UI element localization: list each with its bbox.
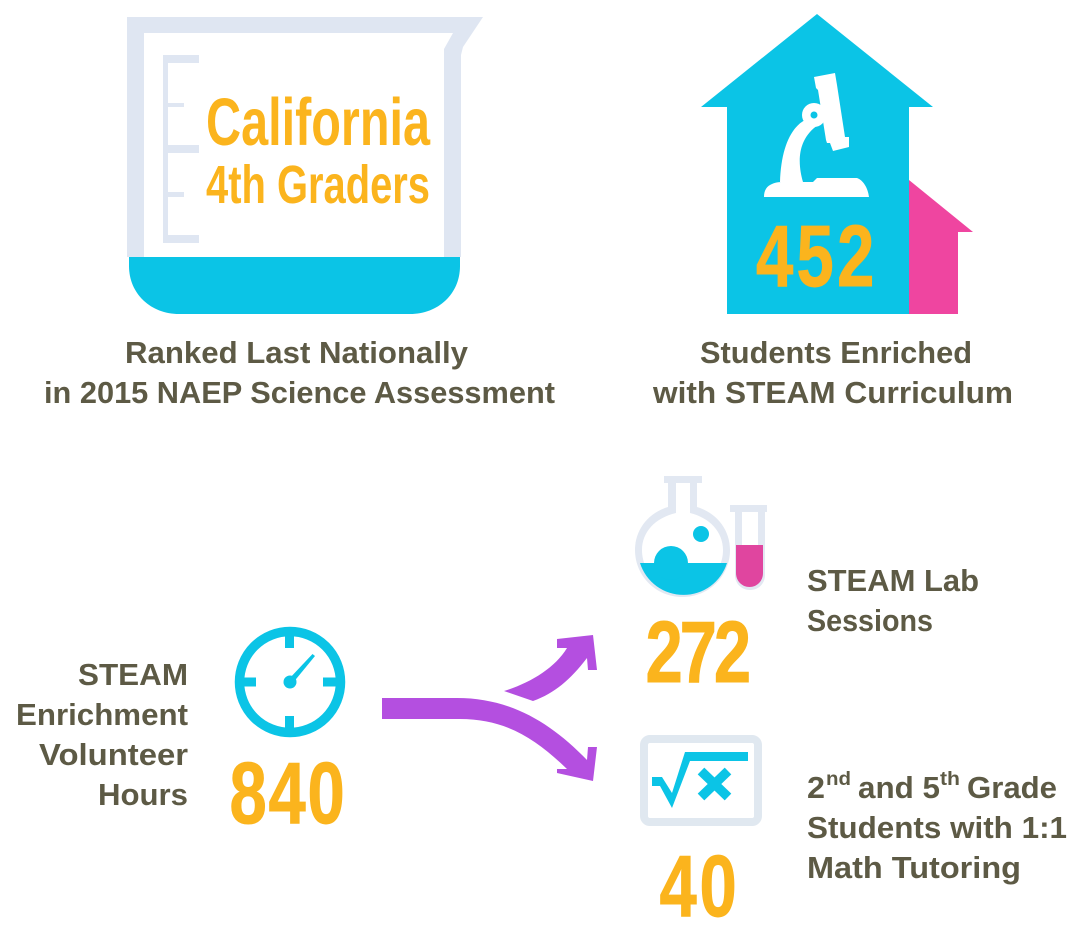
caption: lab sessions	[807, 564, 979, 638]
caption: ranked last: in 2015 NAEP Science Assessment	[44, 376, 555, 410]
icon: beaker scale marks	[163, 55, 199, 243]
caption: volunteer hours: Volunteer	[39, 738, 188, 772]
icon: round flask	[635, 476, 730, 597]
caption: students enriched: with STEAM Curriculum	[652, 376, 1013, 410]
number: 272: 272	[646, 605, 749, 701]
caption: math tutoring: 2	[807, 771, 825, 805]
icon: clock	[240, 632, 340, 732]
caption: math tutoring: Students with 1:1	[807, 811, 1067, 845]
caption: volunteer hours: STEAM	[78, 658, 188, 692]
panel: school house	[701, 14, 973, 314]
icon: microscope	[764, 73, 869, 197]
caption: volunteer hours: Hours	[98, 778, 188, 812]
icon: pink house annex	[909, 180, 973, 314]
caption: ranked last: Ranked Last Nationally	[125, 336, 468, 370]
beaker text: California: California	[206, 85, 431, 160]
beaker text: 4th Graders: 4th Graders	[206, 155, 430, 215]
number: 840: 840	[230, 746, 347, 842]
icon: test tube	[730, 505, 767, 590]
caption: math tutoring: th	[940, 769, 960, 790]
caption: students enriched	[652, 336, 1013, 410]
caption: math tutoring: and 5	[858, 771, 940, 805]
arrow: to lab sessions	[504, 635, 597, 701]
caption: math tutoring	[807, 769, 1067, 885]
icon: cyan house	[701, 14, 933, 314]
caption: volunteer hours: Enrichment	[16, 698, 188, 732]
caption: math tutoring: Grade	[967, 771, 1057, 805]
arrow: to math tutoring	[382, 698, 597, 781]
caption: math tutoring: Math Tutoring	[807, 851, 1021, 885]
caption: math tutoring: nd	[826, 769, 851, 790]
icon: flask and test tube	[635, 476, 767, 597]
caption: students enriched: Students Enriched	[700, 336, 972, 370]
number: 452: 452	[756, 209, 878, 305]
panel: beaker	[127, 17, 483, 314]
icon: math square root	[644, 739, 758, 822]
flask liquid	[640, 563, 727, 595]
caption: lab sessions: Sessions	[807, 604, 933, 638]
caption: volunteer hours	[16, 658, 188, 812]
caption: ranked last	[44, 336, 555, 410]
icon: beaker glass	[127, 17, 483, 257]
caption: lab sessions: STEAM Lab	[807, 564, 979, 598]
icon: beaker liquid	[129, 257, 460, 314]
